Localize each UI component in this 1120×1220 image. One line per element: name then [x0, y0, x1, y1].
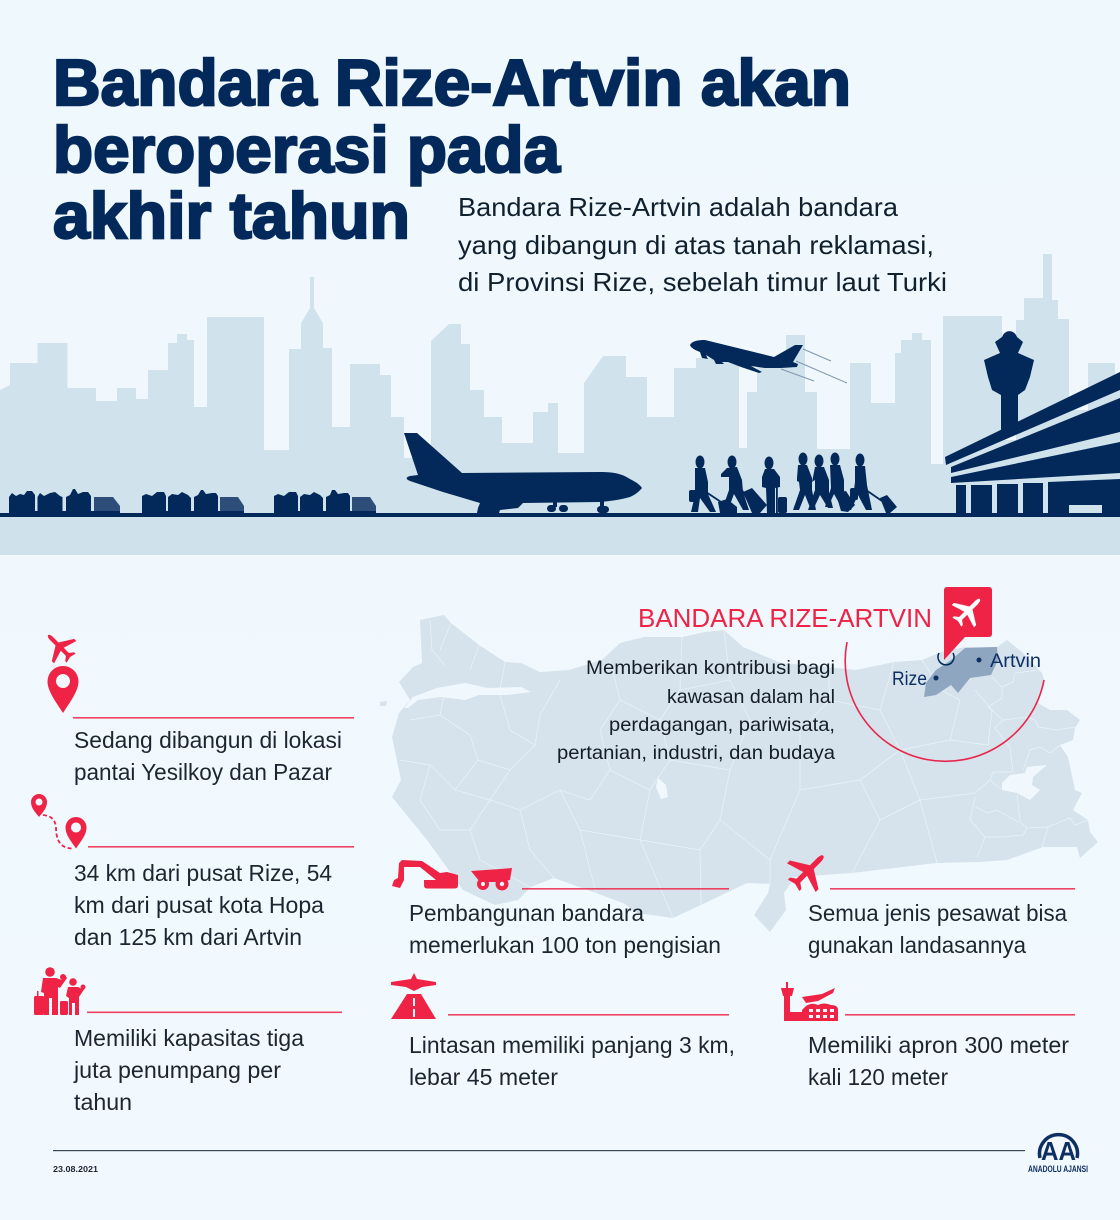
title: Bandara Rize-Artvin akan	[53, 46, 851, 119]
icon: route pins	[31, 794, 86, 848]
flying airplane	[690, 340, 847, 383]
map description: Memberikan kontribusi bagi	[586, 657, 835, 679]
item: construction	[392, 860, 729, 958]
item: location	[37, 624, 354, 785]
airport marker ring	[938, 653, 954, 665]
item: capacity	[34, 967, 342, 1115]
city skyline	[0, 254, 1120, 516]
location pin with plane	[944, 587, 992, 660]
large airplane	[404, 433, 642, 513]
title: akhir tahun	[53, 179, 410, 252]
item: capacity: tahun	[74, 1089, 132, 1115]
logo: Anadolu Ajansi: AA	[1041, 1136, 1076, 1166]
item: distance: dan 125 km dari Artvin	[74, 924, 302, 950]
luggage carts	[9, 489, 376, 513]
item: distance: 34 km dari pusat Rize, 54	[74, 860, 332, 886]
title: beroperasi pada	[53, 113, 561, 186]
footer rule	[53, 1150, 1025, 1151]
map description	[557, 657, 835, 764]
logo: Anadolu Ajansi: ANADOLU AJANSI	[1028, 1164, 1088, 1174]
control tower	[984, 331, 1034, 432]
item: construction: memerlukan 100 ton pengisian	[409, 932, 721, 958]
Rize-Artvin region	[924, 647, 998, 697]
item: distance	[31, 794, 354, 950]
item: capacity: juta penumpang per	[73, 1057, 281, 1083]
icon: runway with plane	[391, 973, 436, 1019]
icon: excavator and dump truck	[392, 860, 512, 890]
intro text	[458, 192, 947, 297]
city labels: Rize	[892, 669, 927, 690]
map description: kawasan dalam hal	[667, 686, 835, 708]
map title: BANDARA RIZE-ARTVIN	[638, 603, 932, 633]
item: runway: Lintasan memiliki panjang 3 km,	[409, 1032, 735, 1058]
runway line	[0, 513, 1120, 517]
Lake Tuz	[656, 778, 668, 799]
map highlight circle	[845, 642, 1044, 761]
intro text: di Provinsi Rize, sebelah timur laut Turki	[458, 267, 947, 297]
small island	[380, 701, 387, 706]
item: distance: km dari pusat kota Hopa	[74, 892, 324, 918]
item: capacity: Memiliki kapasitas tiga	[74, 1025, 304, 1051]
map of Turkey	[380, 610, 1105, 940]
item: aircraft: gunakan landasannya	[808, 932, 1026, 958]
map description: pertanian, industri, dan budaya	[557, 742, 835, 764]
icon: travellers	[34, 967, 86, 1015]
passengers	[689, 452, 897, 513]
intro text: Bandara Rize-Artvin adalah bandara	[458, 192, 899, 222]
city labels	[892, 651, 1041, 690]
item: location: Sedang dibangun di lokasi	[74, 727, 342, 753]
icon: tower and terminal	[781, 982, 838, 1021]
item: apron	[781, 982, 1075, 1090]
item: aircraft: Semua jenis pesawat bisa	[808, 900, 1067, 926]
ground band	[0, 513, 1120, 555]
item: apron: kali 120 meter	[808, 1064, 948, 1090]
title	[53, 46, 851, 252]
item: runway	[391, 973, 735, 1090]
Marmara sea	[404, 683, 531, 708]
item: location: pantai Yesilkoy dan Pazar	[74, 759, 332, 785]
city labels: Artvin	[990, 651, 1041, 672]
terminal building	[945, 372, 1120, 513]
date: 23.08.2021	[53, 1165, 99, 1174]
icon: plane and pin	[37, 624, 82, 713]
item: runway: lebar 45 meter	[409, 1064, 558, 1090]
map description: perdagangan, pariwisata,	[609, 714, 835, 736]
intro text: yang dibangun di atas tanah reklamasi,	[458, 230, 934, 260]
item: construction: Pembangunan bandara	[409, 900, 644, 926]
icon: airplane	[779, 841, 838, 900]
logo: Anadolu Ajansi	[1028, 1135, 1088, 1174]
item: apron: Memiliki apron 300 meter	[808, 1032, 1069, 1058]
item: aircraft	[779, 841, 1075, 958]
Lake Van	[1002, 765, 1047, 800]
